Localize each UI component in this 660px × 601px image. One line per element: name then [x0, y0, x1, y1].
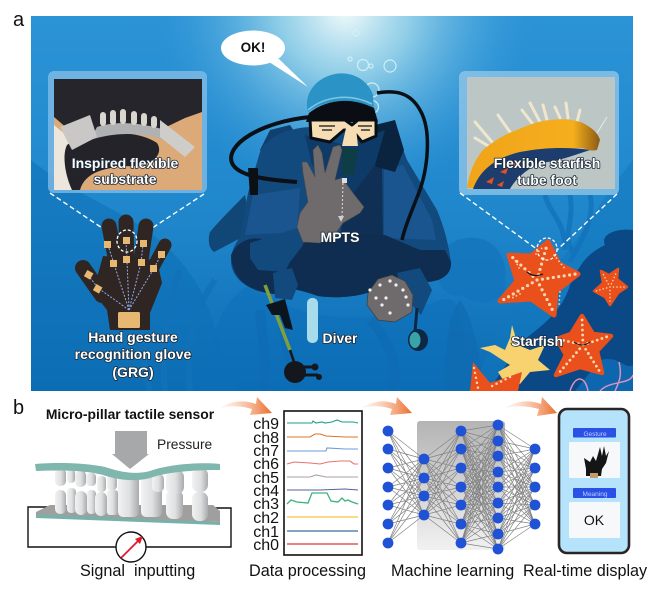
- caption: signal inputting: Signal inputting: [80, 562, 195, 580]
- inset label: [494, 157, 600, 186]
- pressure label: Pressure: [157, 437, 213, 452]
- regulator: [342, 148, 358, 175]
- signal traces: [287, 420, 358, 544]
- label: glove: (GRG): [112, 364, 154, 380]
- pressure arrow: [112, 431, 149, 469]
- right lower arm: [397, 268, 432, 315]
- left sleeve: [250, 228, 303, 272]
- mini glove icon: [584, 446, 609, 478]
- panel a: underwater scene: [31, 16, 633, 391]
- lower starfish: [556, 316, 611, 375]
- caption: data processing: Data processing: [249, 562, 366, 580]
- channel labels: [253, 416, 279, 554]
- right inset: starfish tube foot: [459, 71, 619, 195]
- channel labels: ch2: [253, 510, 279, 527]
- backpack and collar: [374, 120, 404, 172]
- meaning card: [569, 502, 620, 538]
- caption: machine learning: Machine learning: [391, 562, 514, 580]
- channel labels: ch8: [253, 430, 279, 447]
- chest panel: [340, 166, 383, 237]
- caption: real-time display: Real-time display: [523, 562, 648, 580]
- lower glove with sensors: [367, 275, 413, 322]
- MPTS hand: [297, 145, 364, 243]
- label: Diver: Diver: [322, 330, 358, 346]
- diver: [209, 73, 451, 383]
- cylinder: [307, 298, 318, 343]
- gesture card: [569, 442, 620, 478]
- pink coral strands: [570, 362, 633, 391]
- yellow coral: [480, 325, 550, 384]
- tank behind shoulder: [260, 125, 293, 151]
- air bubbles: [348, 30, 396, 114]
- neural network: [383, 420, 540, 554]
- tactile sensor: [35, 463, 220, 525]
- chart frame: [284, 411, 362, 555]
- hose left: [231, 117, 310, 182]
- gesture tag: [573, 428, 616, 438]
- channel labels: ch0: [253, 537, 279, 554]
- ocean background: [31, 16, 633, 391]
- channel labels: ch6: [253, 456, 279, 473]
- circuit: [28, 507, 231, 562]
- channel labels: ch4: [253, 483, 279, 500]
- left lower leg: [273, 268, 298, 300]
- inset label: Flexible starfish: [494, 155, 600, 171]
- label: glove: Hand gesture: [88, 329, 178, 345]
- hose right: [377, 92, 427, 240]
- gesture tag: Gesture: [583, 431, 607, 438]
- label: MPTS: MPTS: [321, 229, 359, 245]
- meaning tag: Meaning: [583, 491, 608, 498]
- lower pillars: [55, 480, 208, 521]
- panel label b: b: [13, 397, 24, 419]
- sensor heading: Micro-pillar tactile sensor: [46, 406, 215, 422]
- teal gauge: [408, 308, 428, 351]
- top flexible layer: [35, 463, 220, 480]
- arrow 2: [362, 397, 412, 415]
- network nodes: [383, 420, 540, 554]
- hood: [307, 73, 374, 112]
- upper pillars: [55, 468, 208, 494]
- seaweed bottom right: [575, 359, 633, 391]
- left jacket panel: [245, 188, 300, 235]
- phone: [559, 409, 629, 553]
- big starfish: [500, 238, 578, 315]
- bottom plate: [36, 505, 220, 522]
- torso and suit: [231, 127, 451, 297]
- label: Starfish: Starfish: [511, 333, 563, 349]
- arrow 1: [220, 397, 272, 415]
- inset label: [72, 157, 179, 185]
- hidden layer panel: [417, 421, 505, 550]
- speech bubble: [221, 30, 308, 87]
- channel labels: ch1: [253, 524, 279, 541]
- meaning card: OK: [584, 512, 605, 528]
- channel labels: ch3: [253, 496, 279, 513]
- reef rock: [488, 230, 633, 391]
- meaning tag: [573, 488, 616, 498]
- label: glove: [75, 329, 192, 380]
- label: glove: recognition glove: [75, 346, 192, 362]
- channel labels: ch5: [253, 470, 279, 487]
- green probe: [265, 285, 290, 350]
- face mask: [310, 120, 376, 146]
- crossed legs: [231, 235, 451, 297]
- inset label: substrate: [93, 171, 157, 187]
- channel labels: ch9: [253, 416, 279, 433]
- black gauge: [284, 350, 322, 383]
- left inset: inspired flexible substrate: [48, 71, 207, 193]
- channel chart: [253, 411, 362, 555]
- channel labels: ch7: [253, 443, 279, 460]
- bubble text: OK!: [241, 40, 265, 55]
- glove: [83, 222, 165, 330]
- zoom guide lines: [50, 193, 617, 250]
- right jacket panel: [384, 165, 436, 240]
- small starfish: [594, 269, 627, 305]
- connections: [388, 425, 535, 549]
- left arm: [208, 195, 246, 252]
- inset label: tube foot: [517, 172, 577, 188]
- arrow 3: [505, 397, 557, 416]
- inset label: Inspired flexible: [72, 155, 179, 171]
- bottom starfish: [470, 362, 522, 391]
- panel label a: a: [13, 9, 25, 31]
- meter needle: [121, 536, 143, 558]
